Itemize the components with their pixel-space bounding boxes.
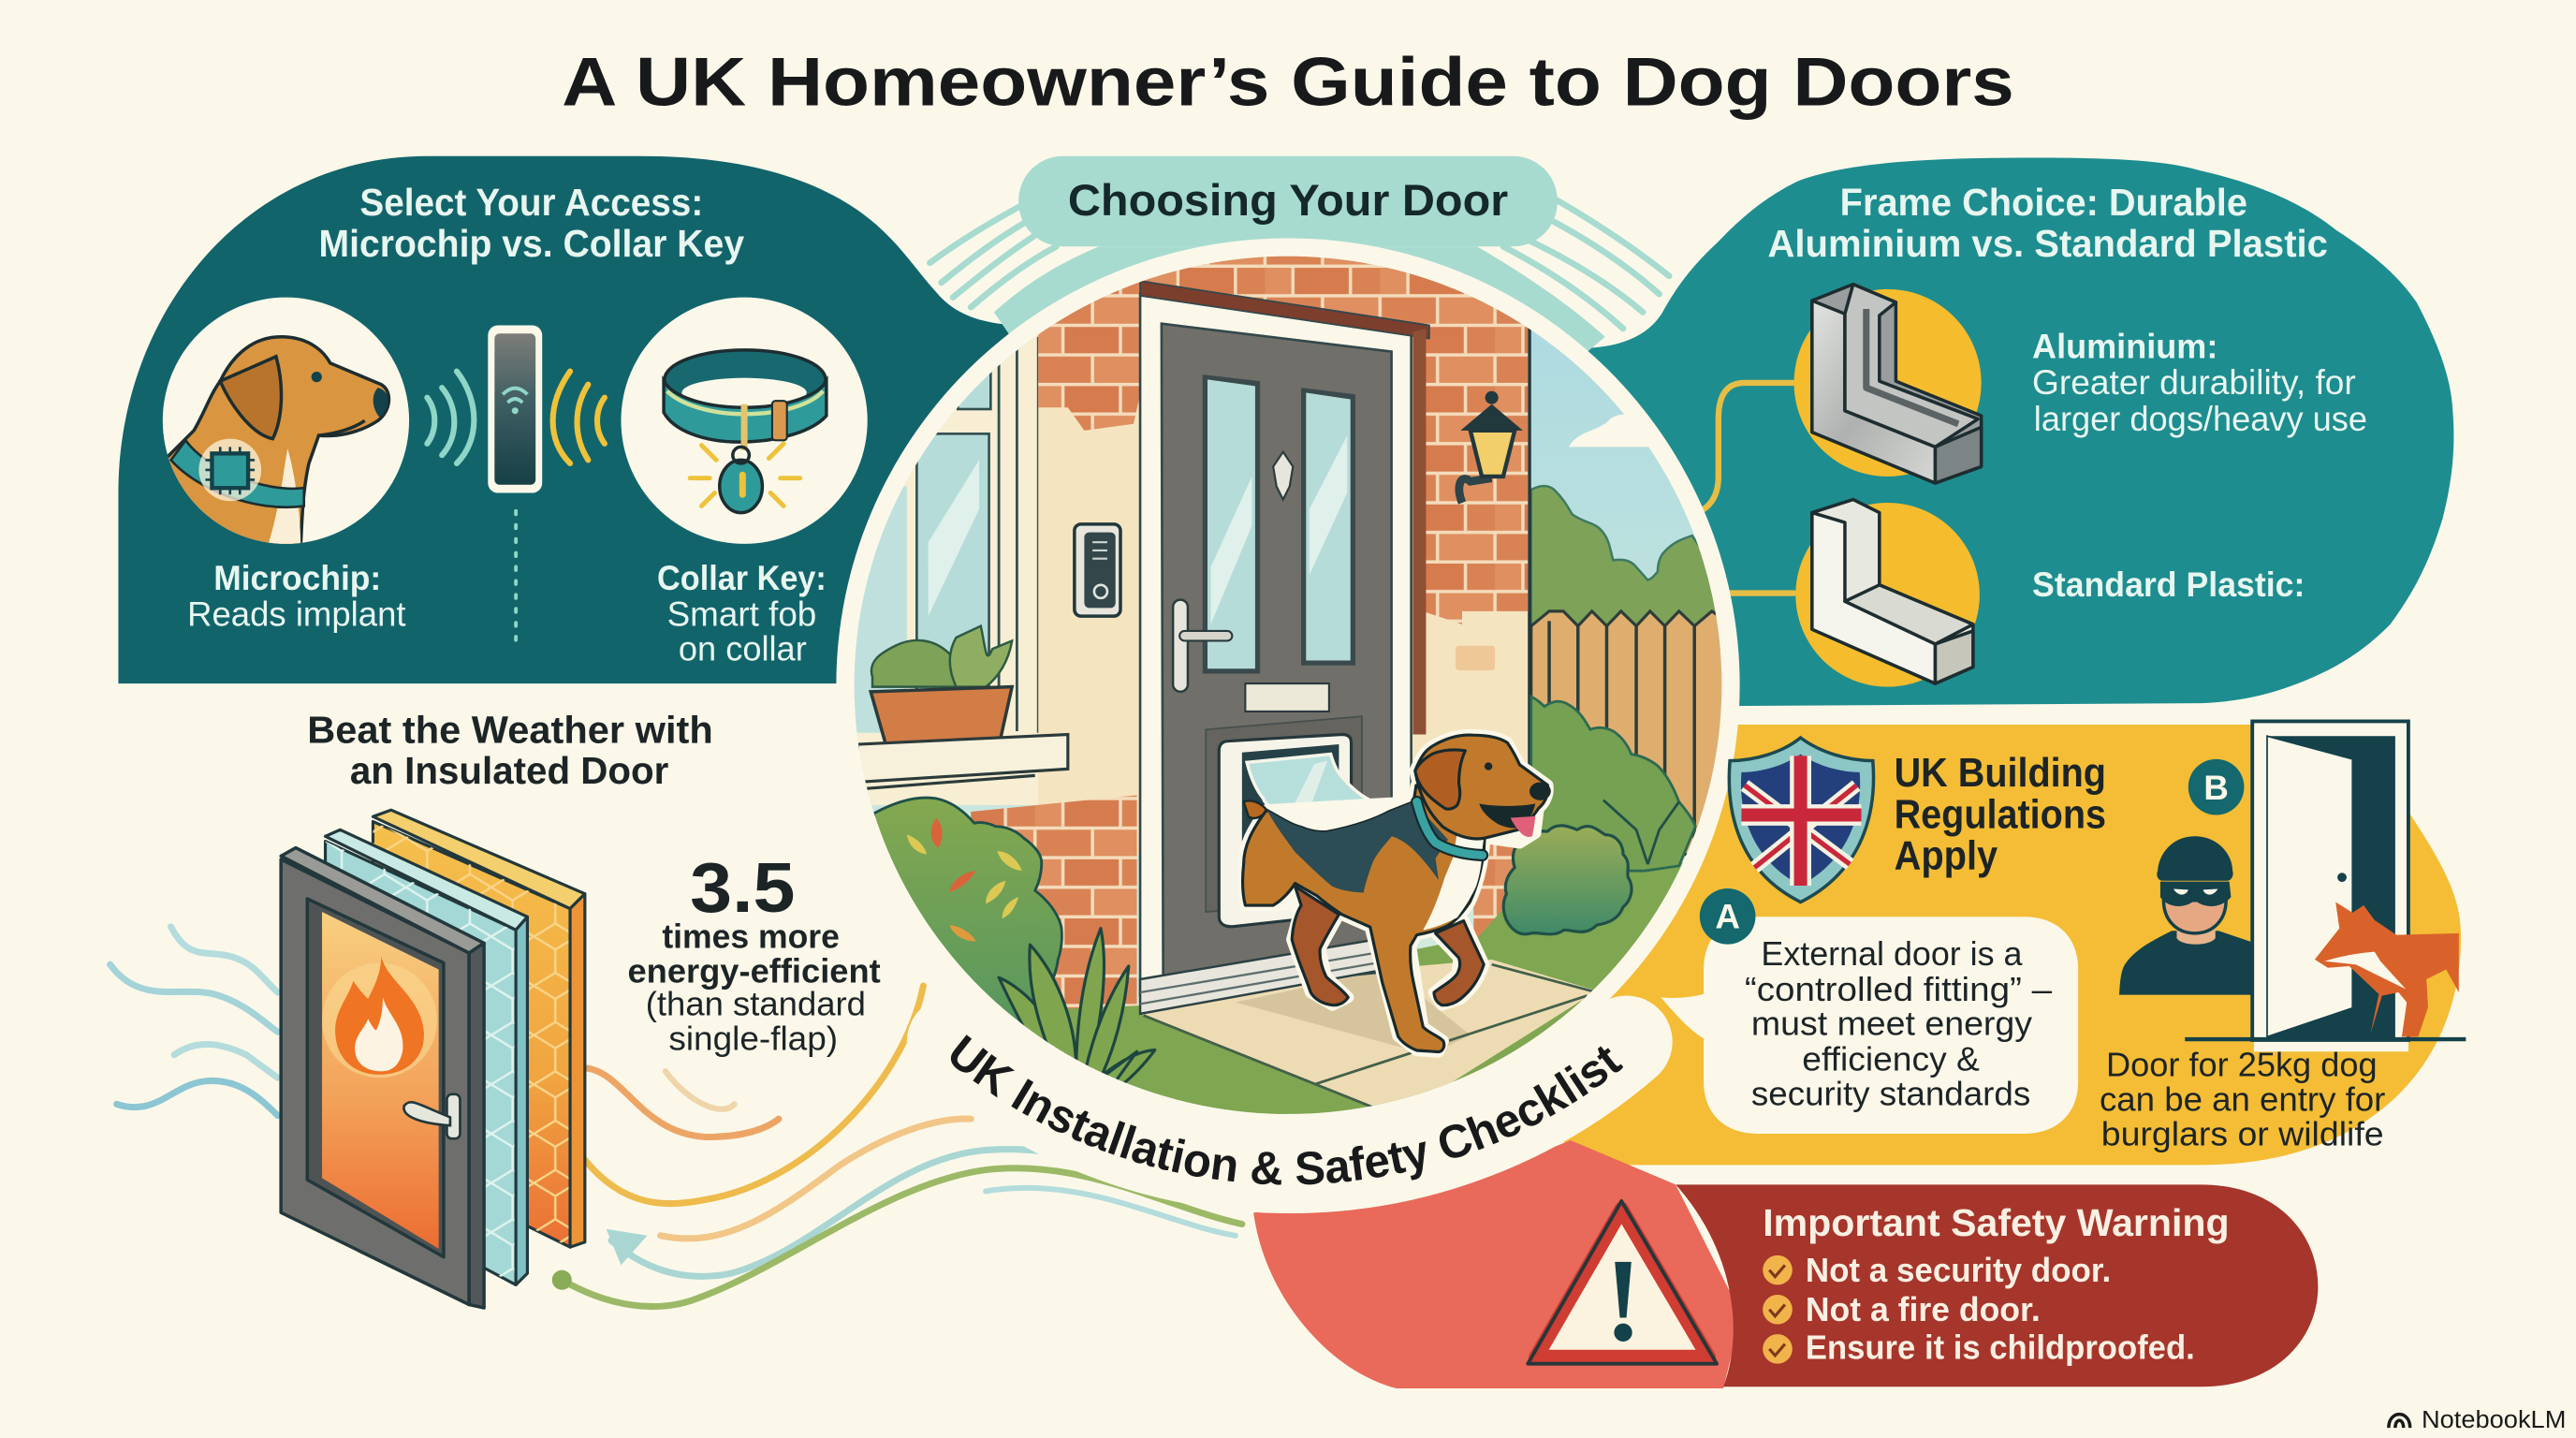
dark red area [1676,1184,2318,1387]
cloud [1569,414,1648,448]
icon: burglar [2120,836,2252,994]
lintel [1140,281,1429,339]
connector lines [1686,383,1794,594]
circle ring [836,238,1740,1132]
door left glass [1203,374,1260,674]
icon: signal waves left [427,372,474,463]
planter [871,626,1012,749]
heading: Beat the Weather with [307,708,713,751]
heading [307,708,713,792]
text: standard plastic: Standard Plastic: [2032,565,2305,604]
spiky plant [999,929,1155,1097]
spyhole [1273,452,1293,500]
stat number: 3.5 [690,848,795,927]
panel background [1577,157,2453,707]
flap opening [1242,744,1339,902]
icon: dog with microchip [148,298,409,550]
text: entry risk: can be an entry for [2100,1079,2385,1118]
path shadow [1236,969,1471,1055]
icon: flame [322,956,437,1078]
label: collar key: on collar [679,630,807,668]
flap reflection [1290,761,1327,818]
tail stub [1244,800,1266,818]
heading: Frame Choice: Durable [1840,181,2247,224]
nose [1530,783,1551,800]
header wings [994,246,1605,444]
tongue [1511,816,1535,837]
warning checklist: Not a security door. [1806,1251,2111,1289]
heading: an Insulated Door [350,749,669,792]
orange layer [373,810,585,1247]
wall plaque [1456,646,1495,670]
yellow disc plastic [1795,503,1980,687]
panel background [118,156,1018,683]
label: microchip [187,559,406,634]
header stripes [929,200,1669,329]
callout A text: security standards [1751,1074,2030,1112]
lower bricks [971,795,1137,1016]
checklist band [953,1042,1627,1167]
badge B [2188,759,2244,814]
title: A UK Homeowner’s Guide to Dog Doors [562,44,2014,120]
door [1162,324,1392,976]
warning checklist: Not a fire door. [1806,1290,2041,1328]
curved heading: checklist: UK Installation & Safety Checklist [951,1034,1623,1185]
wall outline right [1529,320,1530,766]
stat text [627,917,881,1057]
badge A [1700,888,1755,945]
icon: door reader [488,325,542,493]
callout A bubble [1661,917,2078,1134]
right bush back [1531,697,1695,871]
text: aluminium [2032,328,2367,438]
right bush front [1503,826,1632,934]
text: entry risk [2100,1046,2385,1152]
warm air waves [562,986,1242,1307]
letter plate [1245,683,1329,712]
panel: safety warning content [1528,1201,2230,1366]
icon: plastic frame [1812,500,1973,683]
label: microchip: Microchip: [213,559,381,597]
jamb [1412,329,1426,734]
subheading: Aluminium vs. Standard Plastic [1767,222,2328,265]
flap [1247,755,1398,829]
panel: regulations background [1544,725,2461,1165]
label: collar key: Collar Key: [657,559,827,597]
lamp [1459,391,1523,503]
panel: frame choice [1577,157,2453,707]
upper bricks [1038,246,1528,624]
icon: collar with fob [621,298,868,544]
intercom [1075,524,1120,616]
heading [1895,750,2106,878]
chest [1423,827,1486,930]
window sill [857,734,1068,782]
text: entry risk: burglars or wildlife [2101,1114,2384,1152]
fence [1531,611,1734,855]
label: collar key: Smart fob [667,595,816,634]
icon: warning triangle [1528,1201,1717,1364]
trees [1531,486,1741,649]
ground grass [838,862,1741,1151]
far front leg [1434,921,1484,1005]
cold air waves [110,927,278,1116]
door frame [1140,294,1412,996]
header text: Choosing Your Door [1068,176,1508,226]
callout A text: must meet energy [1751,1005,2032,1043]
heading: UK Building [1895,750,2106,796]
lower right bricks [1473,835,1523,940]
arrowhead and end dot [552,1229,648,1290]
wall [1038,246,1530,855]
icon: aluminium frame [1812,285,1982,483]
callout A text: External door is a [1761,934,2022,973]
text: aluminium: Greater durability, for [2032,363,2356,402]
threshold [1140,940,1377,1014]
subheading: Microchip vs. Collar Key [319,222,745,265]
badge A: A [1715,898,1740,936]
scene: dog [1242,735,1551,1052]
threshold lines [1140,953,1377,1004]
collar [1417,801,1483,855]
sky [838,246,1741,1134]
text: entry risk: Door for 25kg dog [2106,1046,2378,1084]
eye [1485,762,1492,770]
heading: Apply [1895,832,1998,878]
flap recess [1206,716,1362,912]
head [1415,735,1548,839]
heading: Select Your Access: [359,181,703,224]
panel: access selection [118,156,1018,683]
light red area [1253,1140,1741,1388]
icon: open door [2185,721,2466,1040]
panel: safety warning background [1253,1140,2318,1388]
callout A text: efficiency & [1802,1039,1980,1078]
text: aluminium: larger dogs/heavy use [2034,400,2367,438]
blue layer [326,829,527,1284]
door right glass [1301,388,1355,666]
path edge lines [1144,964,1597,1108]
garden path [1140,960,1597,1117]
panel: UK building regulations [1661,721,2466,1152]
stat text: single-flap) [668,1019,838,1057]
heading: Regulations [1895,792,2106,838]
icon: fox [2315,902,2459,1036]
header pill [1018,156,1558,246]
watermark: NotebookLM [2422,1405,2566,1433]
door handle [403,1094,460,1138]
body [1242,785,1486,1052]
warning heading: Important Safety Warning [1763,1201,2230,1244]
flap frame [1219,734,1352,927]
warning checklist: Ensure it is childproofed. [1806,1328,2195,1366]
sill lower line [864,775,1035,788]
callout A text [1745,934,2052,1112]
badge B: B [2203,769,2229,807]
door handle [1173,600,1232,692]
label: microchip: Reads implant [187,595,406,634]
panel: insulated door [281,708,881,1308]
text: aluminium: Aluminium: [2032,328,2217,366]
saddle [1267,801,1448,893]
ear [1415,750,1465,809]
stat text: times more [662,917,840,956]
stat text: (than standard [646,985,866,1023]
yellow disc aluminium [1794,289,1982,477]
icon: union flag shield [1729,738,1874,902]
window area [838,246,1044,805]
choosing your door header [929,156,1669,444]
label: collar key [657,559,827,668]
left bush [838,798,1061,1117]
warning checklist [1763,1251,2195,1366]
grey door [281,848,484,1308]
stat text: energy-efficient [627,952,881,990]
near rear leg [1292,887,1348,1005]
bush branches [1603,800,1679,864]
icon: signal waves right [553,372,605,463]
scene: front door illustration [838,246,1741,1151]
callout A text: “controlled fitting” – [1745,970,2052,1008]
dog outline halo [1244,735,1548,1052]
mouth [1479,804,1535,829]
divider dots [515,511,517,649]
